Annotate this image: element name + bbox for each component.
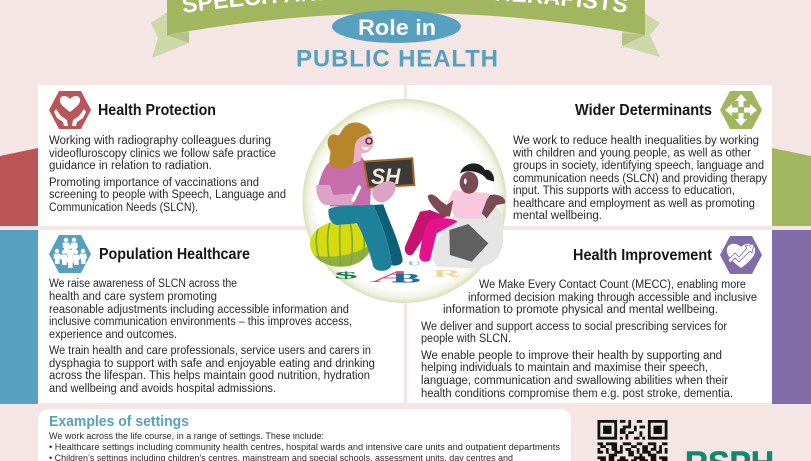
text block: We Make Every Contact Count (MECC), enabling more xyxy=(479,279,746,291)
panel: population healthcare xyxy=(38,230,404,403)
text block: videofluroscopy clinics we follow safe practice xyxy=(49,148,276,160)
text block: groups in society, identifying speech, language and xyxy=(513,160,764,172)
therapist xyxy=(316,122,414,271)
text block xyxy=(49,431,560,461)
text block: We work across the life course, in a range of settings. These include: xyxy=(49,431,324,442)
role in oval: Role in xyxy=(358,15,436,40)
title banner xyxy=(151,0,660,58)
panel: health improvement xyxy=(407,230,772,403)
side band: blue xyxy=(0,230,38,404)
exercise ball xyxy=(310,222,370,267)
text block: and wellbeing and avoids hospital admissions. xyxy=(49,383,276,395)
text block: We deliver and support access to social prescribing services for xyxy=(421,321,727,333)
icon: group of people xyxy=(49,235,91,273)
QR code xyxy=(598,420,668,461)
text block: We raise awareness of SLCN across the xyxy=(49,278,237,290)
floor letters: R xyxy=(433,268,463,279)
central illustration: therapist and child xyxy=(302,99,506,303)
text block xyxy=(421,279,757,400)
text block: communication needs (SLCN) and providing therapy xyxy=(513,173,767,185)
text block: Working with radiography colleagues during xyxy=(49,135,271,147)
side band: red xyxy=(0,148,38,226)
text block: We enable people to improve their health by supporting and xyxy=(421,350,722,362)
text block: across the lifespan. This helps maintain good nutrition, hydration xyxy=(49,370,370,382)
text block: screening to people with Speech, Language and xyxy=(49,189,286,201)
text block: helping individuals to maintain and maximise their speech, xyxy=(421,362,708,374)
icon: four arrows xyxy=(720,91,762,129)
side band: green xyxy=(772,148,811,226)
text block: language, communication and swallowing abilities when their xyxy=(421,375,728,387)
text block: with children and young people, as well as other xyxy=(512,148,751,160)
icon: heart with rising arrow xyxy=(720,236,762,274)
text block: experience and outcomes. xyxy=(49,329,177,341)
floor letters: U xyxy=(407,260,421,267)
text block: dysphagia to support with safe and enjoyable eating and drinking xyxy=(49,358,375,370)
text block: inclusive communication environments – this improves access, xyxy=(49,316,352,328)
text block: We work to reduce health inequalities by working xyxy=(513,135,759,147)
heading: Health Improvement xyxy=(573,247,712,264)
text block: healthcare and employment as well as promoting xyxy=(513,198,755,210)
text block: information to promote physical and mental wellbeing. xyxy=(443,304,718,316)
text block xyxy=(49,278,375,395)
text block: mental wellbeing. xyxy=(513,210,602,222)
text block: reasonable adjustments including accessible information and xyxy=(49,304,349,316)
text block: people with SLCN. xyxy=(421,333,511,345)
icon: heart in hands xyxy=(49,91,91,129)
text block xyxy=(49,135,286,214)
text block: health conditions compromise them e.g. post stroke, dementia. xyxy=(421,388,733,400)
therapist: SH xyxy=(371,164,401,189)
text block: • Healthcare settings including community health centres, hospital wards and intensive care units and outpatient departments xyxy=(49,442,560,453)
text block: We train health and care professionals, service users and carers in xyxy=(49,345,371,357)
text block: Promoting importance of vaccinations and xyxy=(49,177,259,189)
floor letters: $ xyxy=(334,271,358,281)
text block: guidance in relation to radiation. xyxy=(49,160,212,172)
side band: purple xyxy=(772,230,811,404)
text block: informed decision making through accessible and inclusive xyxy=(468,292,757,304)
floor letters: B xyxy=(392,272,421,285)
heading: Examples of settings xyxy=(49,414,189,430)
floor letters: A xyxy=(366,267,423,286)
panel: wider determinants xyxy=(407,85,772,226)
heading: Health Protection xyxy=(98,102,216,119)
heading: Population Healthcare xyxy=(99,246,250,263)
panel: examples of settings xyxy=(38,409,571,461)
text block: Communication Needs (SLCN). xyxy=(49,202,198,214)
heading: Wider Determinants xyxy=(575,102,712,119)
floor letters xyxy=(334,260,463,286)
text block: input. This supports with access to education, xyxy=(513,185,735,197)
role in oval xyxy=(332,10,461,43)
child on bean bag xyxy=(405,163,505,268)
text block: health and care system promoting xyxy=(49,291,217,303)
panel: health protection xyxy=(38,85,404,226)
text block xyxy=(512,135,767,222)
subtitle: public health: PUBLIC HEALTH xyxy=(296,46,498,72)
